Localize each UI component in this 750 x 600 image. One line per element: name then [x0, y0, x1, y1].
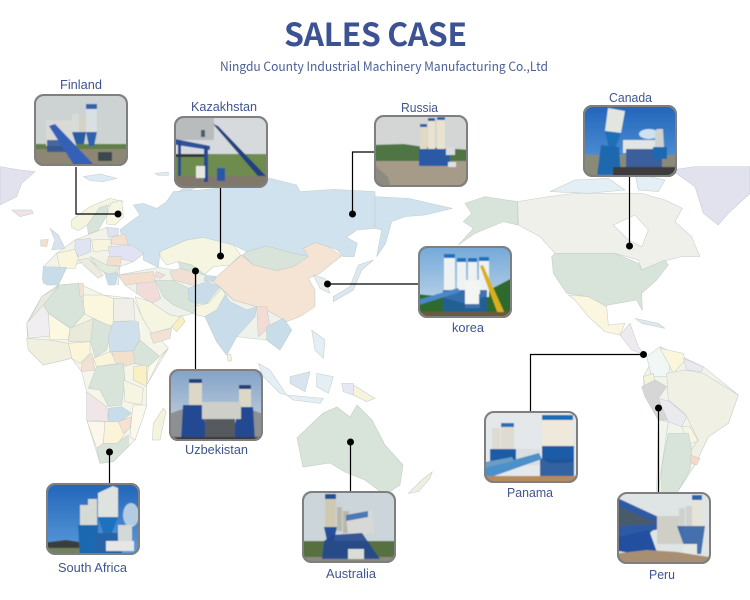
connector lines and location dots: [76, 152, 662, 492]
photo card: Uzbekistan: Uzbekistan: [185, 442, 248, 457]
map: Australia: [297, 405, 403, 495]
photo card: Australia: [302, 491, 396, 578]
photo card: Canada: Canada: [609, 90, 653, 105]
photo card: Panama: [484, 411, 578, 497]
photo card: Uzbekistan: [169, 369, 263, 454]
map: Europe, Africa and Asia: [0, 167, 375, 463]
photo card: Korea: [418, 246, 512, 332]
world map: [0, 167, 750, 495]
photo card: Kazakhstan: [174, 102, 268, 188]
photo card: Finland: [34, 80, 128, 166]
photo card: Russia: Russia: [401, 100, 439, 115]
photo card: Australia: Australia: [326, 566, 377, 581]
photo card: South Africa: [46, 483, 140, 572]
photo card: Peru: [617, 492, 711, 579]
photo card: Kazakhstan: Kazakhstan: [191, 99, 257, 114]
photo card: Canada: [583, 92, 677, 177]
map: Americas and Pacific: [375, 167, 750, 493]
photo card: Korea: korea: [452, 320, 485, 335]
photo card: South Africa: South Africa: [58, 560, 128, 575]
photo card: Finland: Finland: [60, 77, 102, 92]
subtitle: Ningdu County Industrial Machinery Manufacturing Co.,Ltd: [220, 56, 548, 75]
title: SALES CASE: [284, 10, 467, 56]
photo card: Peru: Peru: [649, 567, 675, 582]
photo card: Panama: Panama: [507, 485, 554, 500]
photo card: Russia: [374, 102, 468, 187]
